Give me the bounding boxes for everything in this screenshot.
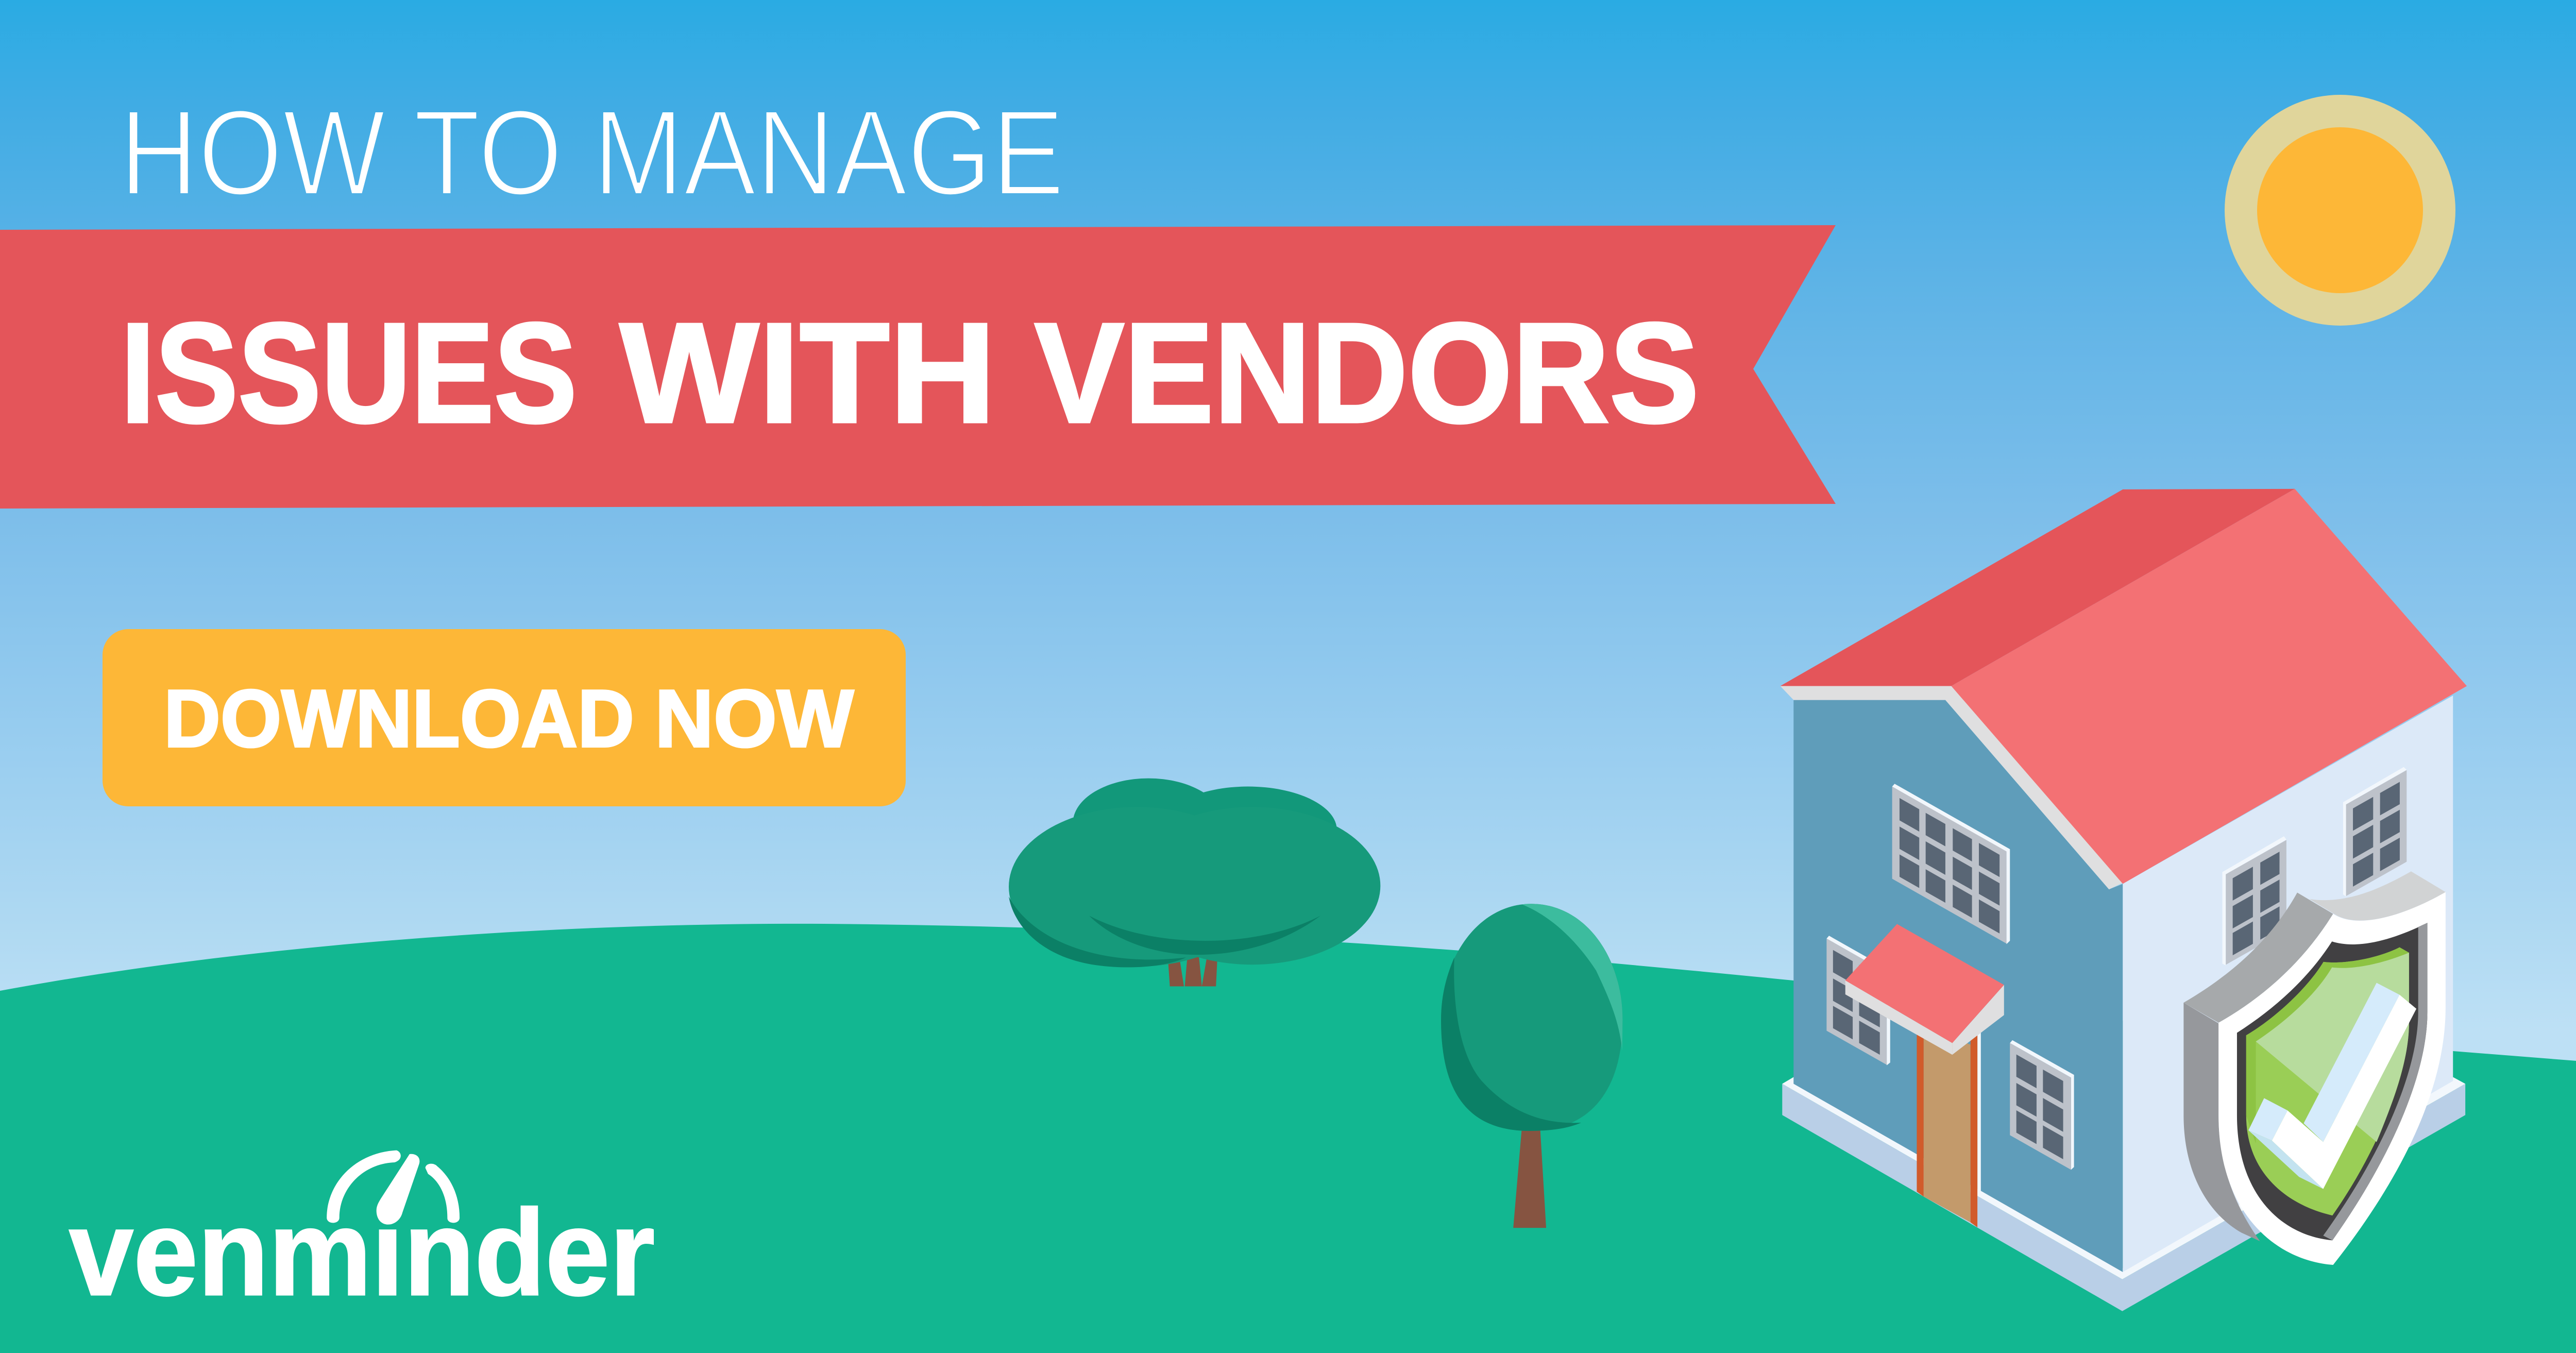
bushy tree <box>1009 779 1380 986</box>
shield side <box>2183 1003 2260 1241</box>
house base slab <box>1782 1077 2465 1311</box>
heading: issues with vendors: VENDORS <box>1035 294 1699 452</box>
sun <box>2225 95 2455 326</box>
heading: how to manage: HOW TO MANAGE <box>120 84 1064 221</box>
shield white face <box>2218 892 2446 1265</box>
porch roof <box>1845 924 2004 1055</box>
shield top right edge <box>2310 871 2446 921</box>
roof dark slope <box>1780 489 2295 686</box>
green hill <box>0 924 2576 1353</box>
shield green field <box>2246 948 2409 1215</box>
shield dark rim <box>2237 923 2428 1240</box>
heading: issues with vendors <box>121 294 1699 452</box>
heading: issues with vendors: ISSUES <box>121 294 577 452</box>
light front wall <box>2123 696 2453 1272</box>
shield darker green band <box>2246 948 2409 1143</box>
roof light slope <box>1951 489 2467 884</box>
shield top left edge <box>2183 892 2333 1023</box>
house <box>1780 489 2467 1311</box>
lower right window <box>2010 1040 2074 1170</box>
door <box>1917 1022 1981 1227</box>
shield light green highlight <box>2256 953 2409 1142</box>
tall tree <box>1441 904 1622 1228</box>
lower left window <box>1826 936 1890 1066</box>
shield with check mark <box>2183 871 2446 1265</box>
download button: DOWNLOAD <box>164 673 634 764</box>
download button: NOW <box>655 673 854 764</box>
logo gauge icon <box>327 1151 460 1225</box>
download button <box>103 629 906 806</box>
check mark <box>2248 983 2416 1189</box>
front window two <box>2343 767 2406 897</box>
large side window <box>1892 784 2010 944</box>
red ribbon banner <box>0 225 1836 509</box>
blue side wall <box>1793 700 2123 1272</box>
roof trim <box>1780 686 2123 889</box>
front window one <box>2223 836 2286 966</box>
shield gray inner edge <box>2323 923 2428 1240</box>
logo wordmark: venminder <box>69 1185 655 1321</box>
heading: issues with vendors: WITH <box>620 294 996 452</box>
venminder logo <box>69 1151 655 1321</box>
